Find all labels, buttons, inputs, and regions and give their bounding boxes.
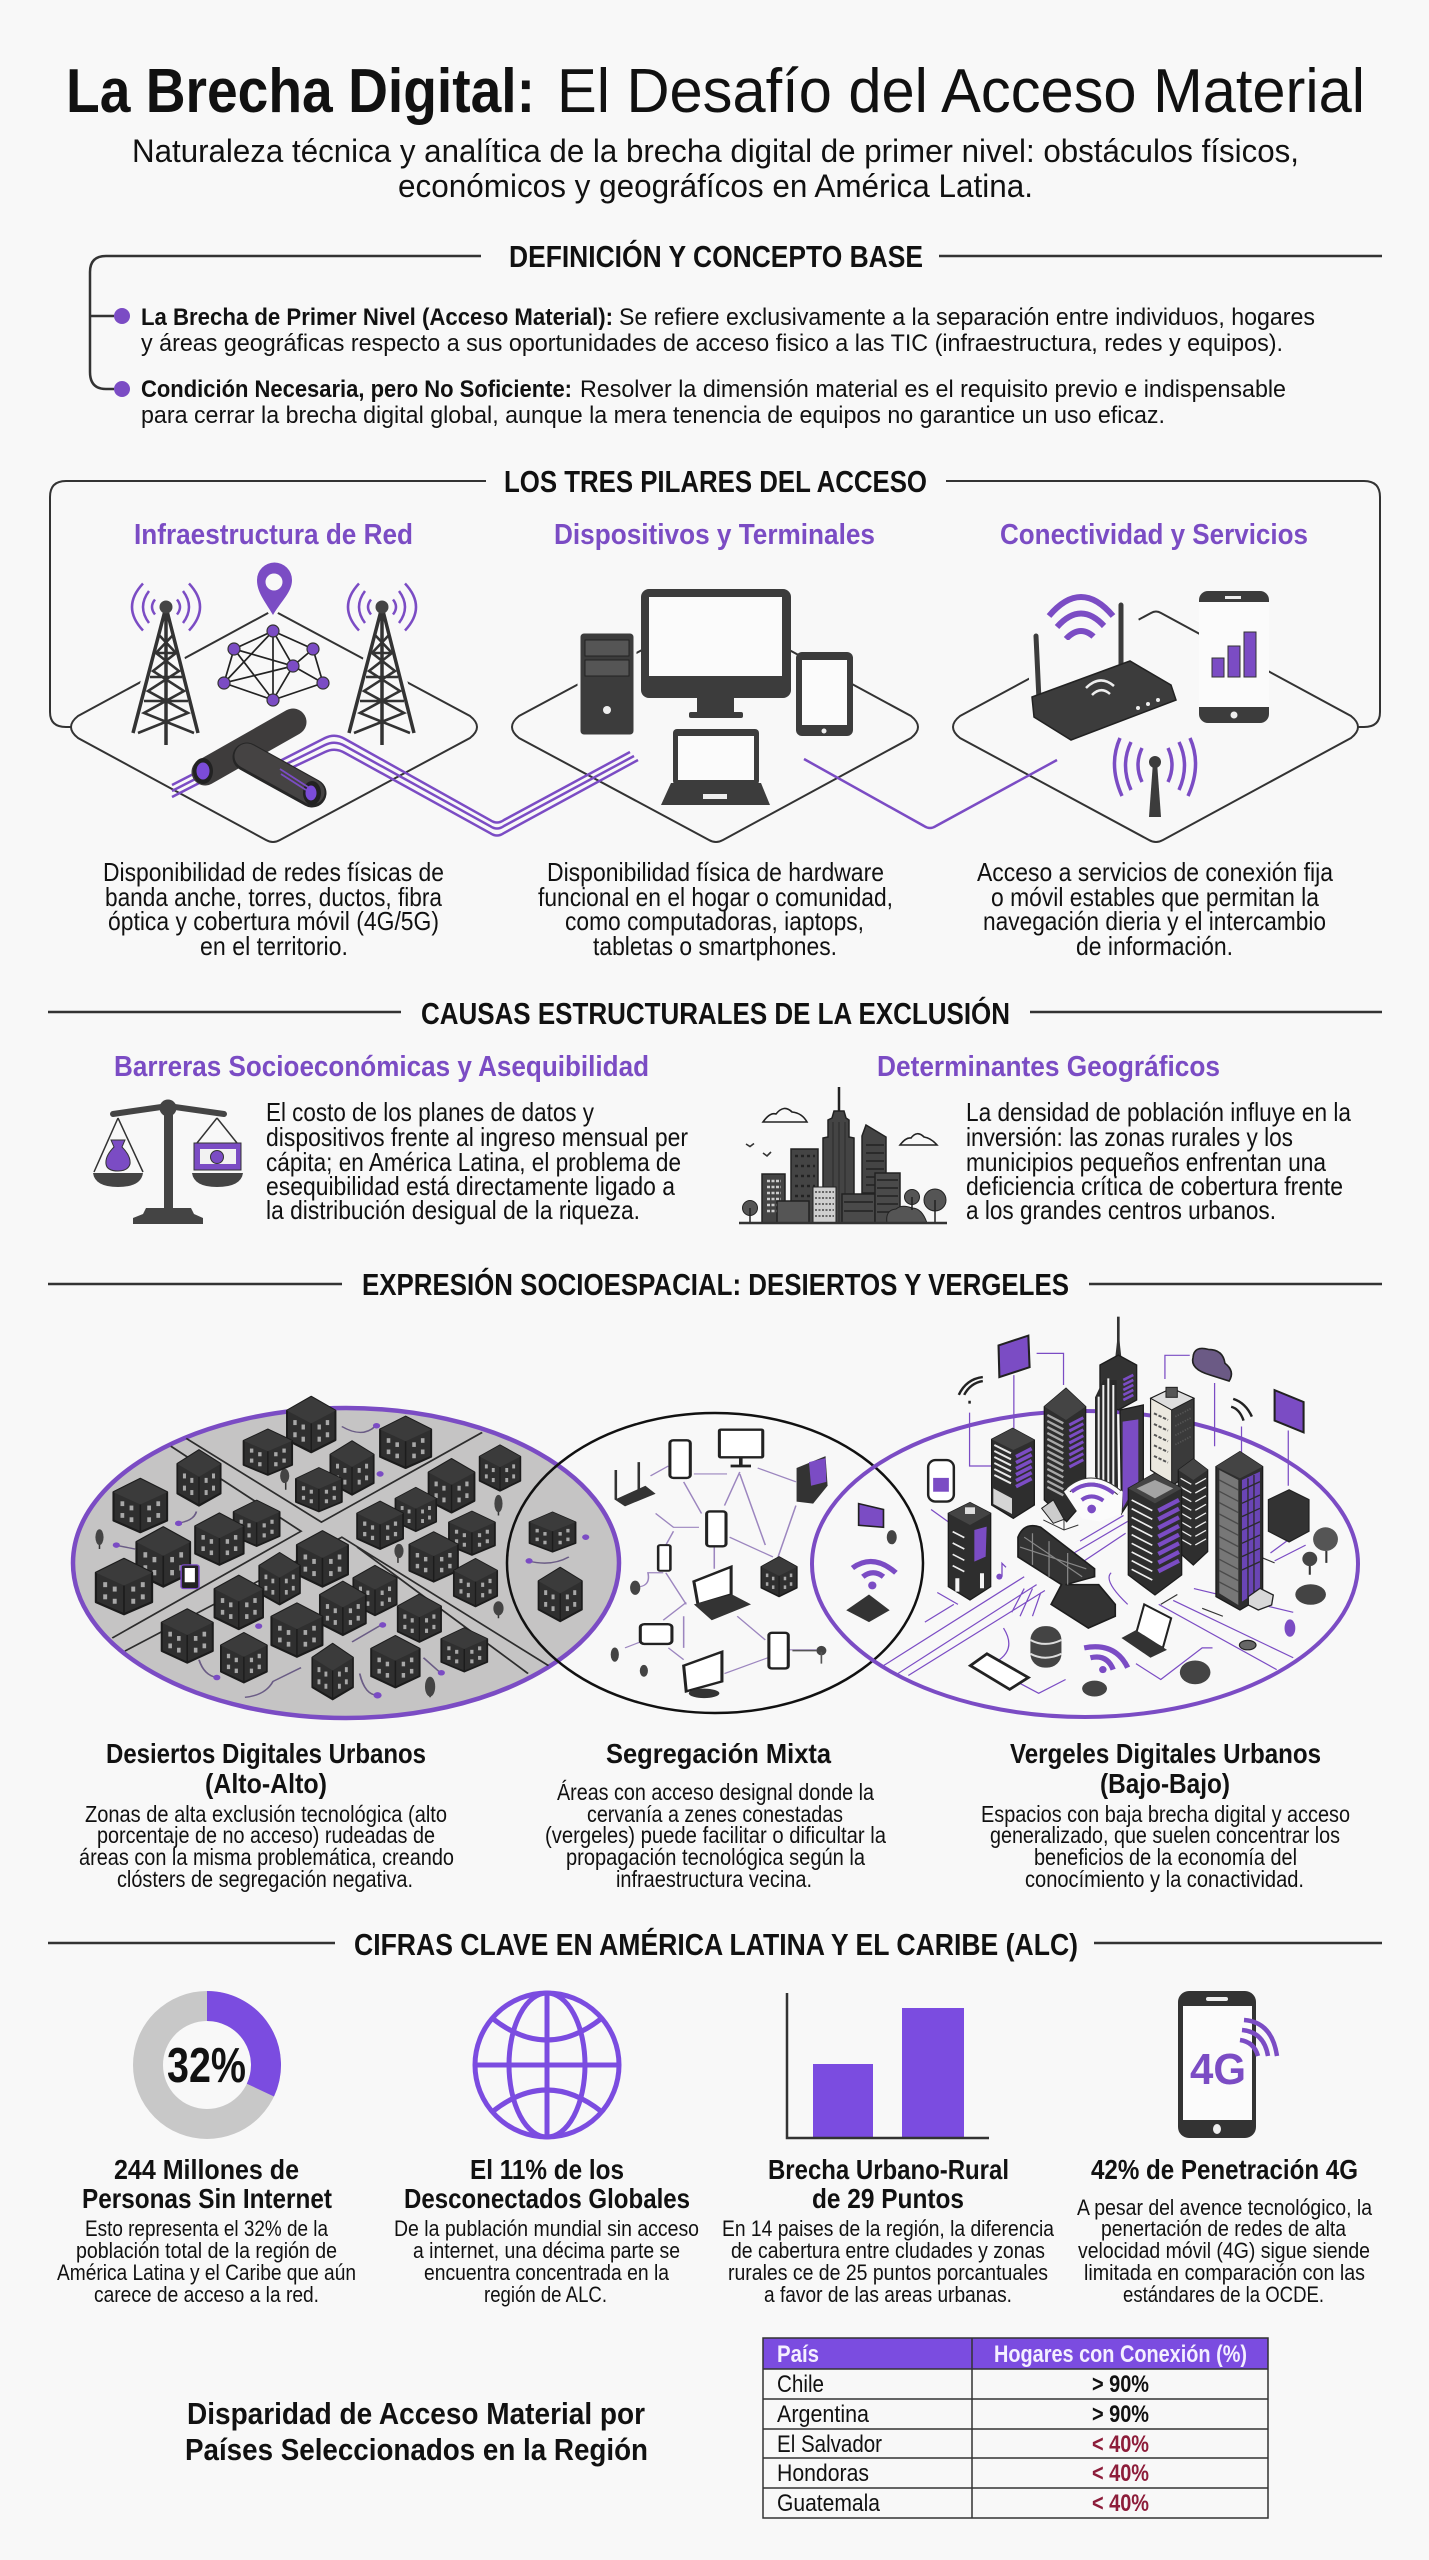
caption: vergeles digitales: beneficios de la economía del bbox=[1034, 1844, 1297, 1870]
stat: brecha urbano-rural: rurales ce de 25 puntos porcantuales bbox=[728, 2260, 1048, 2285]
text: geográficos: deficiencia crítica de cobertura frente bbox=[966, 1171, 1343, 1201]
heading: definición: DEFINICIÓN Y CONCEPTO BASE bbox=[509, 238, 923, 274]
firewall arch bbox=[1018, 1526, 1115, 1628]
tower H front bbox=[948, 1503, 1006, 1600]
tower A bbox=[992, 1428, 1034, 1518]
illustration: vergeles digitales city bbox=[792, 1317, 1338, 1696]
bullet: condición necesaria bbox=[114, 376, 1286, 429]
caption: desiertos digitales: clósters de segregación negativa. bbox=[117, 1866, 413, 1892]
pillar: dispositivos y terminales bbox=[538, 519, 893, 961]
caption: segregación mixta: Áreas con acceso designal donde la bbox=[557, 1779, 874, 1805]
icon: phone bbox=[796, 652, 853, 736]
bullet: condición necesaria: para cerrar la brecha digital global, aunque la mera tenencia de equipos no garantice un uso eficaz. bbox=[141, 402, 1165, 429]
text: geográficos: inversión: las zonas rurales y los bbox=[966, 1122, 1293, 1152]
text: conectividad: de información. bbox=[1076, 931, 1233, 961]
text: dispositivos: funcional en el hogar o comunidad, bbox=[538, 882, 893, 912]
stat: 244 millones: América Latina y el Caribe que aún bbox=[57, 2260, 356, 2285]
stat: brecha urbano-rural: de 29 Puntos bbox=[812, 2183, 964, 2214]
stat: brecha urbano-rural: a favor de las areas urbanas. bbox=[764, 2282, 1012, 2307]
stat: 244 millones: población total de la región de bbox=[76, 2238, 337, 2263]
buildings: desiertos digitales bbox=[96, 1397, 582, 1699]
caption: desiertos digitales: (Alto-Alto) bbox=[205, 1768, 327, 1799]
text: dispositivos: Disponibilidad física de hardware bbox=[547, 857, 884, 887]
caption: desiertos digitales: áreas con la misma problemática, creando bbox=[79, 1844, 454, 1870]
heading: geográficos: Determinantes Geográficos bbox=[877, 1051, 1220, 1083]
panel: los tres pilares del acceso bbox=[50, 464, 1380, 961]
panel: cifras clave bbox=[48, 1927, 1382, 2307]
towers bbox=[948, 1317, 1273, 1610]
stat: 244 millones: 244 Millones de bbox=[114, 2154, 299, 2185]
text: barreras: El costo de los planes de datos y bbox=[266, 1097, 594, 1127]
panel: definición y concepto base bbox=[90, 238, 1382, 429]
caption: vergeles digitales: Vergeles Digitales Urbanos bbox=[1010, 1738, 1321, 1769]
stat: penetración 4G: A pesar del avence tecnológico, la bbox=[1077, 2195, 1373, 2220]
icon: city skyline bbox=[739, 1087, 947, 1223]
caption: vergeles digitales: Espacios con baja brecha digital y acceso bbox=[981, 1801, 1350, 1827]
caption: vergeles digitales: (Bajo-Bajo) bbox=[1100, 1768, 1230, 1799]
subtitle: económicos y geográfícos en América Latina. bbox=[398, 168, 1033, 204]
text: barreras: cápita; en América Latina, el problema de bbox=[266, 1147, 681, 1177]
stat: 11% desconectados: región de ALC. bbox=[484, 2282, 607, 2307]
caption: segregación mixta bbox=[545, 1738, 886, 1892]
pillar: infraestructura de red bbox=[103, 519, 444, 961]
stat: 11% desconectados: a internet, una décima parte se bbox=[413, 2238, 680, 2263]
text: conectividad: Acceso a servicios de conexión fija bbox=[977, 857, 1333, 887]
table title: disparidad: Países Seleccionados en la Región bbox=[185, 2432, 648, 2467]
text: barreras: dispositivos frente al ingreso mensual per bbox=[266, 1122, 688, 1152]
text: barreras bbox=[266, 1097, 688, 1225]
caption: vergeles digitales: generalizado, que suelen concentrar los bbox=[990, 1822, 1340, 1848]
heading: barreras: Barreras Socioeconómicas y Asequibilidad bbox=[114, 1051, 649, 1083]
stat: penetración 4G: velocidad móvil (4G) sigue siende bbox=[1078, 2238, 1370, 2263]
text: infraestructura bbox=[103, 857, 444, 961]
stat: 11% desconectados: Desconectados Globales bbox=[404, 2183, 690, 2214]
tower F big bbox=[1128, 1473, 1182, 1595]
table title: disparidad bbox=[185, 2396, 648, 2467]
venn: left ellipse desiertos bbox=[73, 1408, 619, 1718]
bullet: brecha de primer nivel: La Brecha de Primer Nivel (Acceso Material): bbox=[141, 304, 613, 331]
venn: middle ellipse bbox=[507, 1413, 923, 1713]
donut chart 32%: 32% bbox=[167, 2039, 246, 2093]
icon: monitor bbox=[641, 589, 791, 718]
icon: scale bbox=[93, 1100, 243, 1224]
text: infraestructura: banda anche, torres, ductos, fibra bbox=[105, 882, 442, 912]
table: hogares con conexión: Hogares con Conexión (%) bbox=[994, 2341, 1247, 2368]
text: conectividad: o móvil estables que permitan la bbox=[991, 882, 1319, 912]
stat: penetración 4G bbox=[1077, 1991, 1373, 2307]
small icons bbox=[792, 1336, 1338, 1696]
stat: penetración 4G: 42% de Penetración 4G bbox=[1091, 2154, 1358, 2185]
icon: towers bbox=[130, 584, 418, 747]
bar chart bbox=[787, 1993, 989, 2138]
caption: segregación mixta: cervanía a zenes conestadas bbox=[587, 1801, 843, 1827]
stat: brecha urbano-rural: Brecha Urbano-Rural bbox=[768, 2154, 1009, 2185]
table: hogares con conexión: < 40% bbox=[1092, 2490, 1149, 2517]
caption: vergeles digitales bbox=[981, 1738, 1350, 1892]
stat: 244 millones: carece de acceso a la red. bbox=[94, 2282, 319, 2307]
arch, wifi and small devices bbox=[792, 1336, 1338, 1696]
table: hogares con conexión: El Salvador bbox=[777, 2431, 882, 2458]
bullet: brecha de primer nivel bbox=[114, 304, 1315, 357]
icon: laptop bbox=[661, 729, 770, 805]
text: infraestructura: Disponibilidad de redes físicas de bbox=[103, 857, 444, 887]
icon: ducts bbox=[193, 722, 321, 805]
icon: phone 4G: 4G bbox=[1190, 2045, 1246, 2094]
panel: causas estructurales bbox=[48, 995, 1382, 1225]
tower D cream bbox=[1151, 1387, 1194, 1485]
caption: segregación mixta: Segregación Mixta bbox=[606, 1738, 831, 1769]
subtitle: Naturaleza técnica y analítica de la brecha digital de primer nivel: obstáculos físicos, bbox=[132, 133, 1299, 169]
icon: desktop tower bbox=[579, 632, 635, 736]
stat: brecha urbano-rural bbox=[722, 1993, 1055, 2307]
caption: segregación mixta: propagación tecnológica según la bbox=[566, 1844, 865, 1870]
tower B bbox=[1042, 1388, 1086, 1530]
wifi symbols bbox=[852, 1562, 1128, 1673]
wifi center bbox=[1064, 1478, 1123, 1522]
caption: segregación mixta: (vergeles) puede facilitar o dificultar la bbox=[545, 1822, 886, 1848]
stat: 11% desconectados: El 11% de los bbox=[470, 2154, 624, 2185]
icon: network bbox=[218, 625, 329, 706]
tower G grid bbox=[1216, 1452, 1273, 1610]
title bbox=[66, 57, 1365, 126]
stat: 11% desconectados bbox=[394, 1993, 699, 2307]
stat: 11% desconectados: De la publación mundial sin acceso bbox=[394, 2216, 699, 2241]
bullet: brecha de primer nivel: Se refiere exclusivamente a la separación entre individuos, hogares bbox=[619, 304, 1315, 331]
stat: 244 millones: Personas Sin Internet bbox=[82, 2183, 332, 2214]
text: conectividad: navegación dieria y el intercambio bbox=[983, 906, 1326, 936]
icon: antenna bbox=[1114, 738, 1196, 817]
subtitle bbox=[132, 133, 1299, 204]
stat: 244 millones bbox=[57, 2006, 356, 2307]
icon: wifi bbox=[1049, 597, 1113, 659]
central tall tower bbox=[1095, 1317, 1143, 1513]
pillar: infraestructura de red: Infraestructura de Red bbox=[134, 519, 413, 551]
stat: penetración 4G: penertación de redes de alta bbox=[1101, 2216, 1347, 2241]
venn: right ellipse vergeles bbox=[812, 1411, 1358, 1717]
text: geográficos bbox=[966, 1097, 1351, 1225]
text: dispositivos bbox=[538, 857, 893, 961]
caption: desiertos digitales: porcentaje de no acceso) rudeadas de bbox=[97, 1822, 435, 1848]
pillar: dispositivos y terminales: Dispositivos y Terminales bbox=[554, 519, 875, 551]
icon: phone 4G bbox=[1178, 1991, 1277, 2138]
table: hogares con conexión bbox=[763, 2338, 1268, 2518]
text: conectividad bbox=[977, 857, 1333, 961]
donut chart 32% bbox=[148, 2006, 266, 2124]
text: barreras: esequibilidad está directamente ligado a bbox=[266, 1171, 675, 1201]
caption: desiertos digitales: Zonas de alta exclusión tecnológica (alto bbox=[85, 1801, 447, 1827]
heading: expresión: EXPRESIÓN SOCIOESPACIAL: DESIERTOS Y VERGELES bbox=[362, 1266, 1069, 1302]
stat: penetración 4G: estándares de la OCDE. bbox=[1123, 2282, 1324, 2307]
heading: pilares: LOS TRES PILARES DEL ACCESO bbox=[504, 464, 927, 499]
pillar: conectividad y servicios bbox=[977, 519, 1333, 961]
connecting lines bbox=[172, 736, 1057, 836]
table: hogares con conexión: Guatemala bbox=[777, 2490, 881, 2517]
text: barreras: la distribución desigual de la riqueza. bbox=[266, 1195, 640, 1225]
panel: expresión socioespacial bbox=[48, 1266, 1382, 1892]
stat: 244 millones: Esto representa el 32% de la bbox=[85, 2216, 329, 2241]
table: hogares con conexión: > 90% bbox=[1092, 2371, 1149, 2398]
street and network lines bbox=[883, 1353, 1306, 1693]
heading: cifras: CIFRAS CLAVE EN AMÉRICA LATINA Y EL CARIBE (ALC) bbox=[354, 1927, 1078, 1962]
heading: causas: CAUSAS ESTRUCTURALES DE LA EXCLUSIÓN bbox=[421, 995, 1010, 1031]
table: hogares con conexión: Chile bbox=[777, 2371, 824, 2398]
text: geográficos: municipios pequeños enfrentan una bbox=[966, 1147, 1326, 1177]
text: geográficos: a los grandes centros urbanos. bbox=[966, 1195, 1276, 1225]
title: El Desafío del Acceso Material bbox=[557, 57, 1365, 126]
table: hogares con conexión: > 90% bbox=[1092, 2401, 1149, 2428]
caption: vergeles digitales: conocímiento y la conactividad. bbox=[1025, 1866, 1304, 1892]
stat: brecha urbano-rural: En 14 paises de la región, la diferencia bbox=[722, 2216, 1055, 2241]
stat: penetración 4G: limitada en comparación con las bbox=[1084, 2260, 1365, 2285]
table: hogares con conexión: País bbox=[777, 2341, 819, 2368]
caption: segregación mixta: infraestructura vecina. bbox=[616, 1866, 812, 1892]
text: geográficos: La densidad de población influye en la bbox=[966, 1097, 1351, 1127]
table: hogares con conexión: Hondoras bbox=[777, 2460, 869, 2487]
table: hogares con conexión: Argentina bbox=[777, 2401, 870, 2428]
icon: globe bbox=[475, 1993, 619, 2137]
icon: location pin bbox=[257, 562, 292, 615]
pillar: conectividad y servicios: Conectividad y Servicios bbox=[1000, 519, 1308, 551]
bullet: brecha de primer nivel: y áreas geográficas respecto a sus oportunidades de acceso fisico a las TIC (infraestructura, redes y equipos). bbox=[141, 330, 1283, 357]
table title: disparidad: Disparidad de Acceso Material por bbox=[187, 2396, 645, 2431]
icon: router bbox=[1028, 600, 1180, 745]
bullet: condición necesaria: Condición Necesaria, pero No Soficiente: bbox=[141, 376, 572, 403]
title: La Brecha Digital: bbox=[66, 57, 535, 126]
bullet: condición necesaria: Resolver la dimensión material es el requisito previo e indispensable bbox=[580, 376, 1286, 403]
table: hogares con conexión: < 40% bbox=[1092, 2460, 1149, 2487]
stat: 11% desconectados: encuentra concentrada en la bbox=[424, 2260, 670, 2285]
caption: desiertos digitales bbox=[79, 1738, 454, 1892]
text: dispositivos: como computadoras, iaptops, bbox=[565, 906, 864, 936]
devices: segregación mixta bbox=[611, 1430, 816, 1698]
tower E bbox=[1178, 1459, 1208, 1565]
stat: brecha urbano-rural: de cabertura entre cludades y zonas bbox=[731, 2238, 1045, 2263]
text: dispositivos: tabletas o smartphones. bbox=[593, 931, 837, 961]
text: infraestructura: óptica y cobertura móvil (4G/5G) bbox=[108, 906, 439, 936]
table: hogares con conexión: < 40% bbox=[1092, 2431, 1149, 2458]
text: infraestructura: en el territorio. bbox=[200, 931, 348, 961]
caption: desiertos digitales: Desiertos Digitales Urbanos bbox=[106, 1738, 426, 1769]
icon: smartphone with bars bbox=[1199, 591, 1269, 723]
